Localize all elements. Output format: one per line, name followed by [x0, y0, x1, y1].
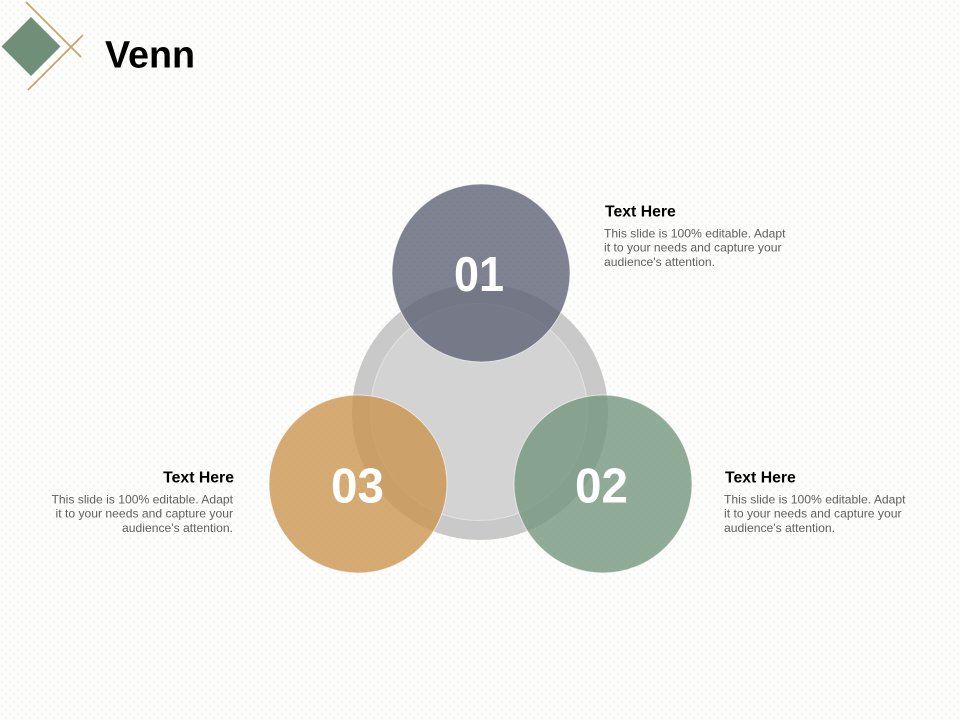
text block 02: it to your needs and capture your	[724, 506, 902, 520]
text block 03	[51, 470, 234, 535]
circle 01	[392, 184, 570, 362]
text block 03: This slide is 100% editable. Adapt	[51, 492, 234, 506]
text block 03: Text Here	[163, 470, 234, 486]
text block 02	[724, 470, 906, 535]
circle 03	[269, 395, 447, 573]
circle 02: 02	[575, 460, 628, 514]
text block 01: audience's attention.	[604, 255, 715, 269]
circle 02	[514, 395, 692, 573]
text block 01: This slide is 100% editable. Adapt	[604, 226, 786, 240]
text block 02: audience's attention.	[724, 521, 835, 535]
circle 03: 03	[331, 460, 384, 514]
icon: diamond logo	[2, 2, 83, 90]
text block 02: This slide is 100% editable. Adapt	[724, 492, 906, 506]
venn diagram	[269, 184, 692, 573]
text block 01	[604, 204, 786, 269]
large ring	[352, 284, 608, 540]
text block 03: it to your needs and capture your	[56, 506, 233, 520]
text block 01: Text Here	[605, 204, 676, 220]
text block 01: it to your needs and capture your	[604, 240, 782, 254]
circle 01: 01	[454, 248, 504, 302]
title: Venn	[105, 34, 195, 76]
text block 02: Text Here	[725, 470, 796, 486]
text block 03: audience's attention.	[122, 521, 233, 535]
